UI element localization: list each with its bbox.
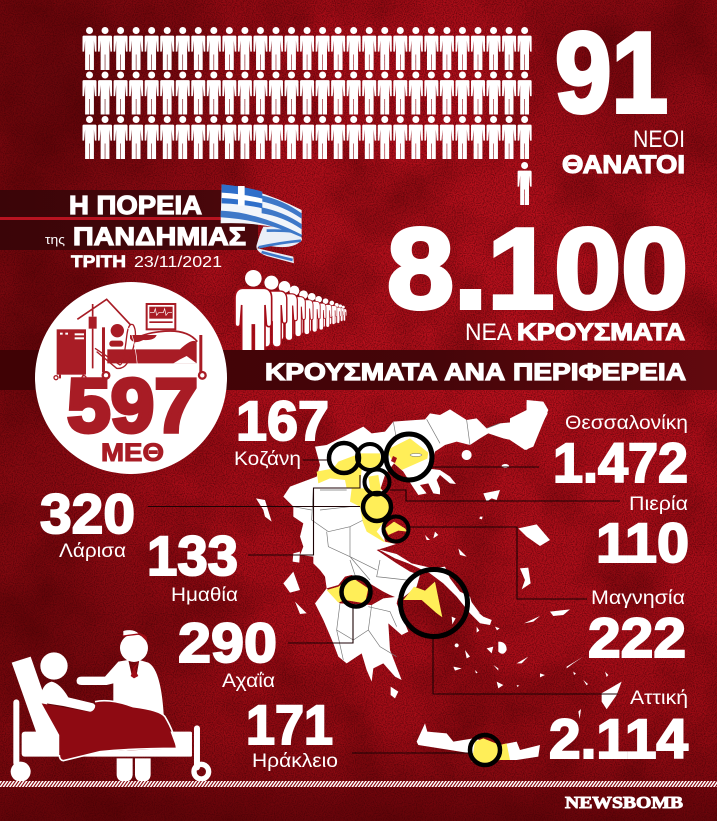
stat: 91 new deaths: 91 [555,10,668,137]
highlight circles [329,434,500,765]
number: 597: 597 [67,364,198,449]
stat: Larisa: Λάρισα [59,541,126,562]
stat: Attica: 2.114 [549,707,688,770]
leader lines [148,460,620,753]
stat: Thessaloniki: 1.472 [553,431,688,494]
title: the course of the pandemic: ΠΑΝΔΗΜΙΑΣ [73,223,246,251]
stat: Imathia: Ημαθία [171,585,238,606]
pictogram: rows of people for deaths [82,27,532,205]
title: the course of the pandemic [45,190,246,251]
stat: Heraklion: 171 [246,693,333,756]
logo: NEWSBOMB: NEWSBOMB [565,793,683,812]
stat: 8.100 new cases: ΝΕΑ [465,319,512,346]
mainland and islands [283,402,550,625]
title: the course of the pandemic: της [45,232,65,247]
stat: 91 new deaths: ΝΕΟΙ [633,126,685,153]
stat: Kozani: Κοζάνη [234,449,301,470]
stat: Achaia: 290 [178,611,277,674]
stat: Magnesia: 222 [588,606,686,669]
stat: Imathia: 133 [147,524,238,587]
icon: queue of people [235,270,347,355]
stat: Attica: Αττική [630,688,688,709]
date: 23/11/2021 [134,254,222,271]
stat: 8.100 new cases: ΚΡΟΥΣΜΑΤΑ [517,319,685,346]
stat: 91 new deaths: ΘΑΝΑΤΟΙ [562,151,685,179]
date: ΤΡΙΤΗ [71,253,126,271]
title banner bands [0,190,258,250]
stat: Achaia: Αχαΐα [222,671,275,692]
region borders [293,419,500,580]
stat: Thessaloniki: Θεσσαλονίκη [565,413,688,434]
stat: Pieria: 110 [596,511,689,574]
stat: Heraklion: Ηράκλειο [252,751,338,772]
icon: greek flag ribbon [221,184,302,263]
banner: cases per region: ΚΡΟΥΣΜΑΤΑ ΑΝΑ ΠΕΡΙΦΕΡΕΙΑ [265,359,686,386]
date [71,253,222,271]
icon: ICU bed [54,299,206,380]
map of Greece [148,400,622,765]
hatched footer stripe [0,781,717,821]
title: the course of the pandemic: Η ΠΟΡΕΙΑ [69,190,202,220]
panel: ICU badge [35,282,227,474]
stat: Larisa: 320 [40,482,135,545]
stat: Pieria: Πιερία [629,494,688,515]
stat: Magnesia: Μαγνησία [591,588,685,609]
stat: Kozani: 167 [236,389,329,452]
label: MEΘ: ΜΕΘ [101,439,164,467]
icon: doctor and patient in bed [11,630,209,782]
highlighted regions in yellow [317,438,442,617]
stat: 8.100 new cases: 8.100 [387,206,688,333]
banner: cases per region [0,350,717,390]
